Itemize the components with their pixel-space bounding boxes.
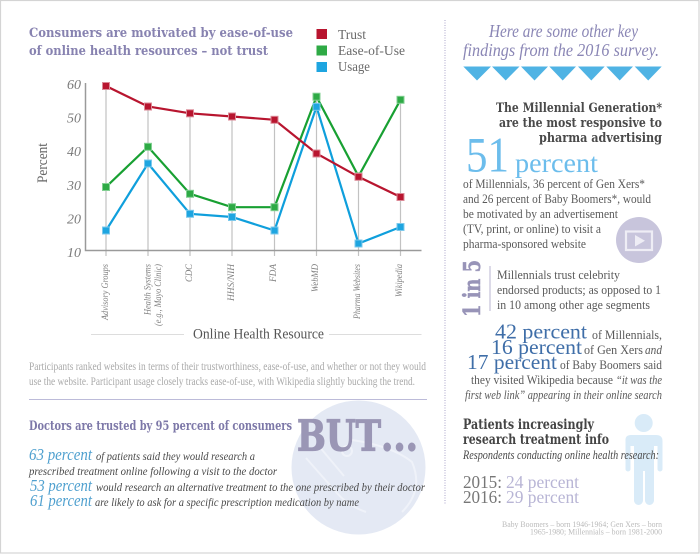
triangle row: [463, 66, 662, 80]
doctor statistics: [28, 445, 425, 510]
category labels: Wikipedia: [394, 264, 404, 297]
category labels: FDA: [268, 263, 278, 283]
chart description: [29, 361, 426, 388]
legend: [316, 27, 405, 74]
yearly statistics: 2015:: [463, 472, 502, 492]
text: celebrity trust: [497, 267, 661, 312]
category labels: [100, 263, 404, 326]
heading: doctors trusted: Doctors are trusted by 95 percent of consumers: [29, 419, 292, 434]
series: usage: [102, 107, 404, 247]
heading: patients research: Patients increasingly: [463, 417, 595, 433]
y axis tick labels: 20: [67, 212, 81, 228]
text: celebrity trust: in 10 among other age segments: [497, 297, 650, 312]
doctor statistics: of patients said they would research a: [96, 449, 255, 463]
y axis tick labels: 30: [66, 179, 81, 194]
text: wikipedia stats: of Gen Xers: [584, 342, 643, 357]
chart description: use the website. Participant usage closely tracks ease-of-use, with Wikipedia slightly bucking the trend.: [29, 376, 415, 388]
chart description: Participants ranked websites in terms of their trustworthiness, ease-of-use, and whether or not they would: [29, 361, 426, 373]
yearly statistics: 29 percent: [506, 487, 579, 507]
heading: consumers motivated: of online health resources – not trust: [29, 44, 268, 59]
footnote: Baby Boomers – born 1946-1964; Gen Xers – born: [502, 519, 663, 529]
heading: consumers motivated: [29, 26, 293, 59]
BUT... callout: ...: [381, 412, 418, 460]
subheading: respondents: Respondents conducting online health research:: [462, 448, 659, 462]
category labels: CDC: [184, 263, 194, 282]
category labels: HHS/NIH: [226, 263, 236, 302]
x axis title: Online Health Resource: [193, 326, 324, 342]
heading: patients research: [463, 417, 609, 448]
series: trust: [102, 82, 404, 200]
heading: patients research: research treatment info: [463, 432, 609, 448]
series: ease-of-use: [102, 93, 404, 211]
category labels: Pharma Websites: [352, 264, 362, 320]
text: celebrity trust: Millennials trust celebrity: [497, 267, 620, 282]
y axis tick labels: [66, 78, 81, 261]
doctor statistics: would research an alternative treatment to the one prescribed by their doctor: [96, 480, 425, 494]
stat: 51 percent: percent: [515, 147, 598, 178]
legend: Trust: [338, 27, 366, 42]
y axis tick labels: 40: [67, 145, 81, 160]
text: advertising motivation: of Millennials, 36 percent of Gen Xers*: [463, 176, 645, 191]
footnote: 1965-1980; Millennials – born 1981-2000: [530, 526, 662, 536]
legend: Usage: [338, 59, 370, 74]
doctor statistics: prescribed treatment online following a visit to the doctor: [28, 464, 277, 478]
text: advertising motivation: and 26 percent of Baby Boomers*, would: [463, 191, 651, 206]
doctor statistics: are likely to ask for a specific prescription medication by name: [95, 495, 360, 509]
category labels: Advisory Groups: [100, 264, 110, 321]
y axis title: Percent: [35, 143, 51, 183]
axes: [86, 83, 422, 250]
footnote: [502, 519, 663, 536]
stat: 1 in 5: 1 in 5: [459, 260, 486, 317]
heading: millennial generation: [496, 101, 662, 146]
heading: millennial generation: pharma advertising: [539, 131, 662, 146]
text: wikipedia stats: of Baby Boomers said: [560, 357, 662, 372]
text: wikipedia stats: they visited Wikipedia because: [471, 372, 613, 387]
text: advertising motivation: be motivated by an advertisement: [463, 206, 618, 221]
text: advertising motivation: (TV, print, or online) to visit a: [463, 221, 601, 236]
stat: 51 percent: [466, 126, 598, 182]
y axis tick labels: 10: [67, 246, 81, 261]
heading: millennial generation: are the most responsive to: [499, 116, 662, 131]
text: wikipedia stats: of Millennials,: [592, 327, 662, 342]
y axis tick labels: 50: [67, 112, 81, 126]
heading: key findings: findings from the 2016 survey.: [463, 40, 659, 60]
doctor statistics: 63 percent: [29, 445, 93, 464]
heading: key findings: [463, 21, 659, 60]
doctor statistics: 61 percent: [30, 491, 93, 510]
text: celebrity trust: endorsed products; as opposed to 1: [497, 282, 661, 297]
icon: person: [625, 414, 662, 505]
yearly statistics: 24 percent: [506, 472, 579, 492]
category labels: WebMD: [310, 264, 320, 292]
icon: stethoscope circle: [292, 400, 426, 534]
text: wikipedia stats: 17 percent: [467, 350, 557, 374]
category labels: (e.g., Mayo Clinic): [153, 264, 163, 326]
y axis tick labels: 60: [67, 78, 81, 93]
line chart: [35, 78, 422, 342]
heading: consumers motivated: Consumers are motivated by ease-of-use: [29, 26, 293, 41]
yearly statistics: 2016:: [463, 487, 502, 507]
heading: key findings: Here are some other key: [488, 21, 638, 41]
text: advertising motivation: [463, 176, 651, 251]
category labels: Health Systems: [142, 264, 152, 316]
text: wikipedia stats: 42 percent: [495, 320, 587, 344]
legend: Ease-of-Use: [338, 43, 405, 58]
yearly statistics: [463, 472, 579, 507]
BUT... callout: BUT: [297, 412, 381, 460]
usage marker over WebMD: [313, 103, 320, 110]
gridlines: [106, 86, 400, 256]
text: wikipedia stats: 16 percent: [491, 335, 582, 359]
heading: millennial generation: The Millennial Generation*: [496, 101, 662, 116]
doctor statistics: 53 percent: [30, 476, 93, 495]
icon: video play: [616, 217, 662, 263]
stat: 51 percent: 51: [466, 126, 509, 182]
text: advertising motivation: pharma-sponsored website: [463, 236, 586, 251]
text: wikipedia stats: “it was the: [616, 373, 662, 387]
text: wikipedia stats: [465, 320, 662, 402]
text: wikipedia stats: and: [645, 342, 662, 357]
